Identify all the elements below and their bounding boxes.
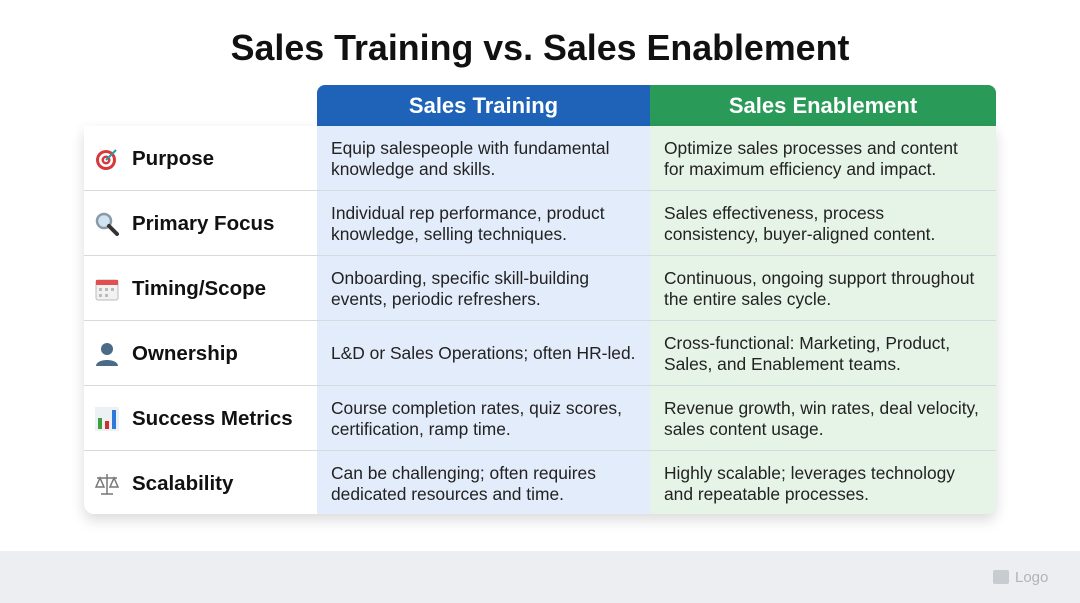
row: scalability: dedicated resources and time. [331,484,564,504]
row: timing: Timing/Scope [132,277,266,300]
row: primary focus: knowledge, selling techniques. [331,224,567,244]
row: timing [84,256,996,321]
row: scalability: Highly scalable; leverages technology [664,463,955,483]
row: success metrics: Success Metrics [132,407,293,430]
footer band [0,551,1080,603]
row: ownership: Sales, and Enablement teams. [664,354,901,374]
row: primary focus: Sales effectiveness, process [664,203,884,223]
header: sales enablement: Sales Enablement [729,93,917,118]
row: scalability: Scalability [132,472,233,495]
icon: person [96,343,118,366]
row: ownership: Ownership [132,342,238,365]
row: success metrics: Revenue growth, win rates, deal velocity, [664,398,979,418]
row: primary focus: Primary Focus [132,212,274,235]
title: Sales Training vs. Sales Enablement [231,28,849,68]
row: purpose: Purpose [132,147,214,170]
row: success metrics [84,386,996,451]
row: scalability [94,463,955,504]
header: sales training: Sales Training [409,93,558,118]
logo: Logo [1015,569,1048,586]
row: timing: the entire sales cycle. [664,289,831,309]
row: ownership: Cross-functional: Marketing, Product, [664,333,950,353]
header: sales enablement [650,85,996,127]
row: primary focus: consistency, buyer-aligned content. [664,224,935,244]
row: purpose: knowledge and skills. [331,159,495,179]
row: purpose: for maximum efficiency and impact. [664,159,936,179]
icon: scales [94,474,120,495]
row: purpose: Optimize sales processes and content [664,138,958,158]
logo [993,569,1048,586]
row: timing: events, periodic refreshers. [331,289,541,309]
row: timing: Onboarding, specific skill-building [331,268,589,288]
row: purpose [84,126,996,191]
row: success metrics: certification, ramp time. [331,419,511,439]
row: success metrics: Course completion rates, quiz scores, [331,398,622,418]
row: primary focus [84,191,996,256]
row: timing: Continuous, ongoing support throughout [664,268,974,288]
table card [84,126,996,514]
row: ownership [84,321,996,386]
row: ownership: L&D or Sales Operations; often HR-led. [331,343,635,363]
row: scalability: and repeatable processes. [664,484,869,504]
row: scalability: Can be challenging; often requires [331,463,596,483]
row: success metrics: sales content usage. [664,419,824,439]
row: primary focus: Individual rep performance, product [331,203,605,223]
row: purpose: Equip salespeople with fundamental [331,138,609,158]
icon: target [96,149,117,170]
icon: magnifier [96,212,120,236]
icon: bar chart [95,407,119,431]
header: sales training [317,85,650,127]
icon: calendar [96,280,118,300]
